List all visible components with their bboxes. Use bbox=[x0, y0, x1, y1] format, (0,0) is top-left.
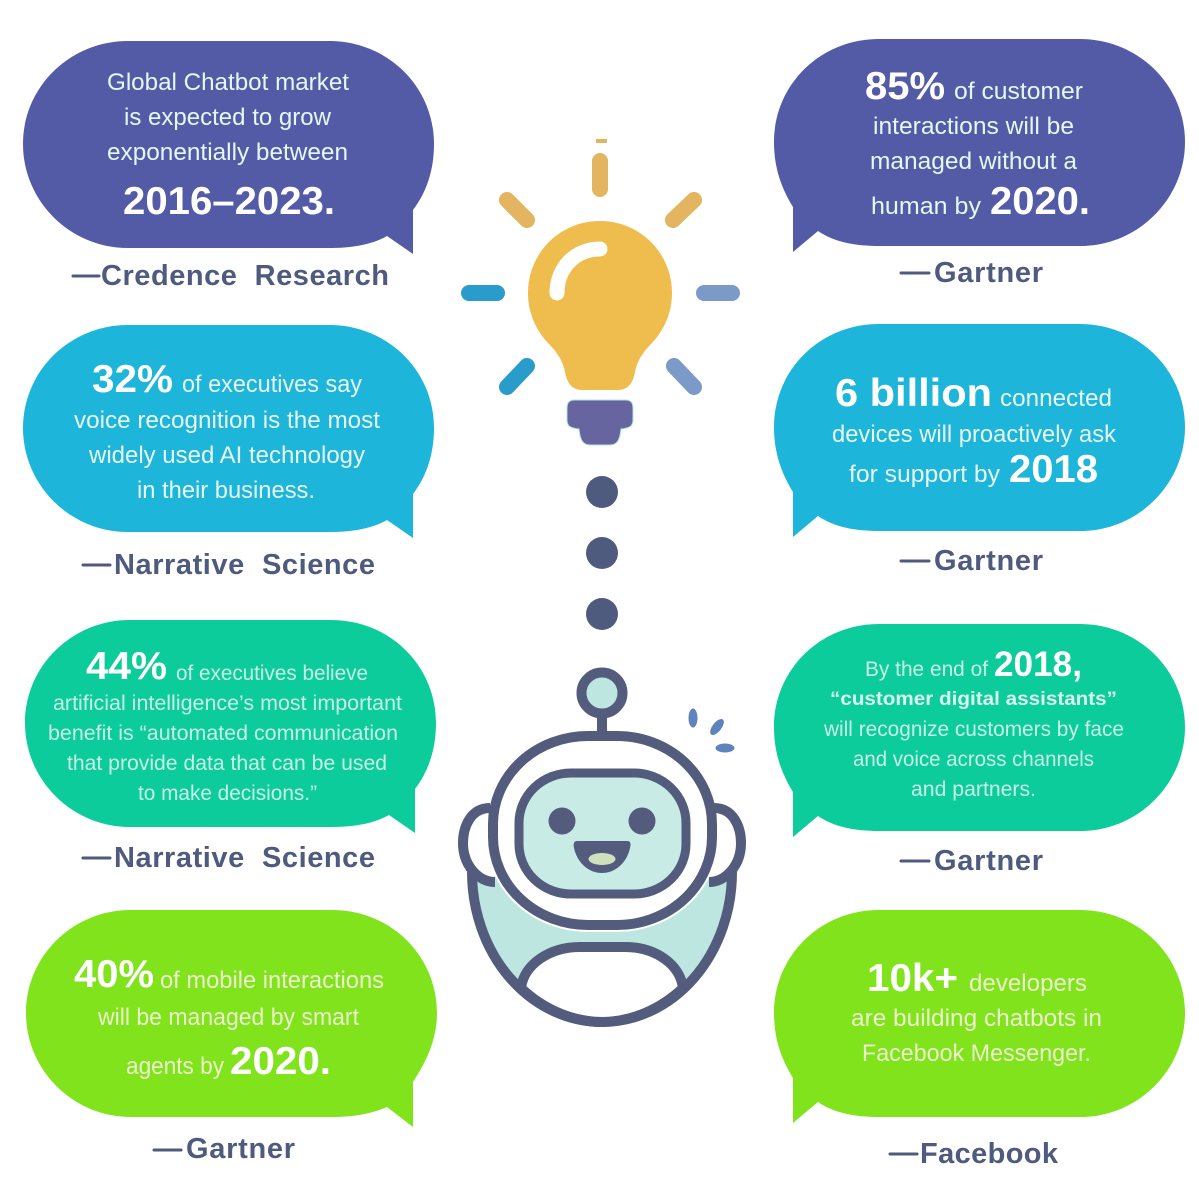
panel: 6 billion connected devices: connected bbox=[1000, 385, 1112, 412]
panel: 32% of executives: 32% bbox=[92, 358, 173, 401]
panel: 44% of executives: benefit is “automated communication bbox=[48, 722, 398, 745]
panel: 44% of executives bbox=[25, 620, 436, 833]
panel: 10k+ developers bbox=[774, 910, 1185, 1123]
icon: robot bbox=[463, 672, 741, 1022]
panel: 10k+ developers: are building chatbots in bbox=[851, 1005, 1102, 1032]
panel: customer digital assistants: 2018, bbox=[994, 645, 1082, 684]
bulb base bbox=[567, 400, 633, 445]
robot antenna bbox=[582, 672, 622, 738]
panel: customer digital assistants: and voice across channels bbox=[853, 748, 1094, 771]
panel: 10k+ developers: 10k+ bbox=[867, 957, 958, 1000]
panel: Global Chatbot market bbox=[23, 41, 434, 254]
panel: 44% of executives: that provide data that can be used bbox=[67, 752, 387, 775]
panel: 85% of customer interactions: 85% bbox=[865, 65, 945, 108]
panel: 32% of executives: voice recognition is the most bbox=[74, 407, 380, 434]
light rays bbox=[469, 161, 732, 387]
source: Gartner: Gartner bbox=[934, 845, 1043, 877]
panel: 85% of customer interactions: 2020. bbox=[990, 180, 1090, 223]
robot mouth bbox=[574, 841, 631, 873]
robot tongue bbox=[588, 853, 616, 865]
robot face bbox=[519, 773, 686, 894]
panel: 32% of executives bbox=[23, 325, 434, 538]
robot body bbox=[472, 872, 732, 1022]
head halo bbox=[493, 736, 712, 925]
panel: 32% of executives: of executives say bbox=[182, 371, 362, 398]
robot ears bbox=[463, 808, 495, 882]
source: Credence Research: Credence Research bbox=[101, 260, 389, 292]
source: Gartner: Gartner bbox=[186, 1133, 295, 1165]
robot belly bbox=[521, 947, 683, 1022]
robot eyes bbox=[548, 808, 656, 834]
panel: 6 billion connected devices: 6 billion bbox=[835, 372, 992, 415]
ray fragment bbox=[596, 139, 607, 143]
connecting dots bbox=[586, 476, 618, 630]
panel: Global Chatbot market: 2016–2023. bbox=[123, 180, 335, 223]
panel: customer digital assistants: and partners. bbox=[911, 778, 1036, 801]
panel: 40% of mobile interactions bbox=[26, 910, 437, 1127]
panel: Global Chatbot market: is expected to grow bbox=[124, 104, 332, 131]
panel: 40% of mobile interactions: 2020. bbox=[230, 1040, 331, 1083]
bulb highlight bbox=[557, 249, 600, 293]
source: Narrative Science: Narrative Science bbox=[114, 549, 375, 581]
panel: 85% of customer interactions: of customer bbox=[954, 78, 1083, 105]
panel: 6 billion connected devices: devices will proactively ask bbox=[832, 421, 1117, 448]
panel: 6 billion connected devices bbox=[774, 324, 1185, 537]
panel: 10k+ developers: Facebook Messenger. bbox=[862, 1040, 1091, 1067]
source: Facebook: Facebook bbox=[920, 1138, 1059, 1170]
panel: 10k+ developers: developers bbox=[969, 970, 1087, 997]
panel: 32% of executives: widely used AI technology bbox=[88, 442, 365, 469]
bulb glass bbox=[528, 221, 672, 390]
panel: Global Chatbot market: exponentially between bbox=[107, 139, 348, 166]
panel: 44% of executives: of executives believe bbox=[176, 662, 368, 685]
panel: 40% of mobile interactions: of mobile interactions bbox=[160, 967, 384, 994]
panel: 85% of customer interactions bbox=[774, 39, 1185, 252]
robot sparks bbox=[688, 708, 734, 752]
panel: customer digital assistants: “customer digital assistants” bbox=[830, 689, 1117, 710]
panel: 85% of customer interactions: interactions will be bbox=[873, 113, 1074, 140]
panel: customer digital assistants: By the end of bbox=[865, 658, 988, 681]
icon: light bulb bbox=[469, 139, 732, 445]
source: Gartner: Gartner bbox=[934, 545, 1043, 577]
source: Narrative Science: Narrative Science bbox=[114, 842, 375, 874]
panel: 6 billion connected devices: 2018 bbox=[1009, 448, 1098, 491]
panel: 40% of mobile interactions: 40% bbox=[74, 953, 154, 996]
source: Gartner: Gartner bbox=[934, 257, 1043, 289]
panel: 85% of customer interactions: managed without a bbox=[870, 148, 1078, 175]
robot head bbox=[493, 736, 712, 925]
panel: 40% of mobile interactions: will be managed by smart bbox=[97, 1004, 359, 1031]
panel: Global Chatbot market: Global Chatbot market bbox=[107, 69, 349, 96]
panel: 44% of executives: 44% bbox=[86, 645, 167, 688]
panel: 85% of customer interactions: human by bbox=[871, 193, 981, 220]
panel: customer digital assistants bbox=[774, 624, 1185, 837]
panel: customer digital assistants: will recognize customers by face bbox=[823, 718, 1124, 741]
panel: 44% of executives: to make decisions.” bbox=[138, 782, 317, 805]
panel: 32% of executives: in their business. bbox=[137, 477, 315, 504]
panel: 40% of mobile interactions: agents by bbox=[126, 1053, 224, 1080]
panel: 44% of executives: artificial intelligence’s most important bbox=[53, 692, 402, 715]
panel: 6 billion connected devices: for support by bbox=[849, 461, 1000, 488]
